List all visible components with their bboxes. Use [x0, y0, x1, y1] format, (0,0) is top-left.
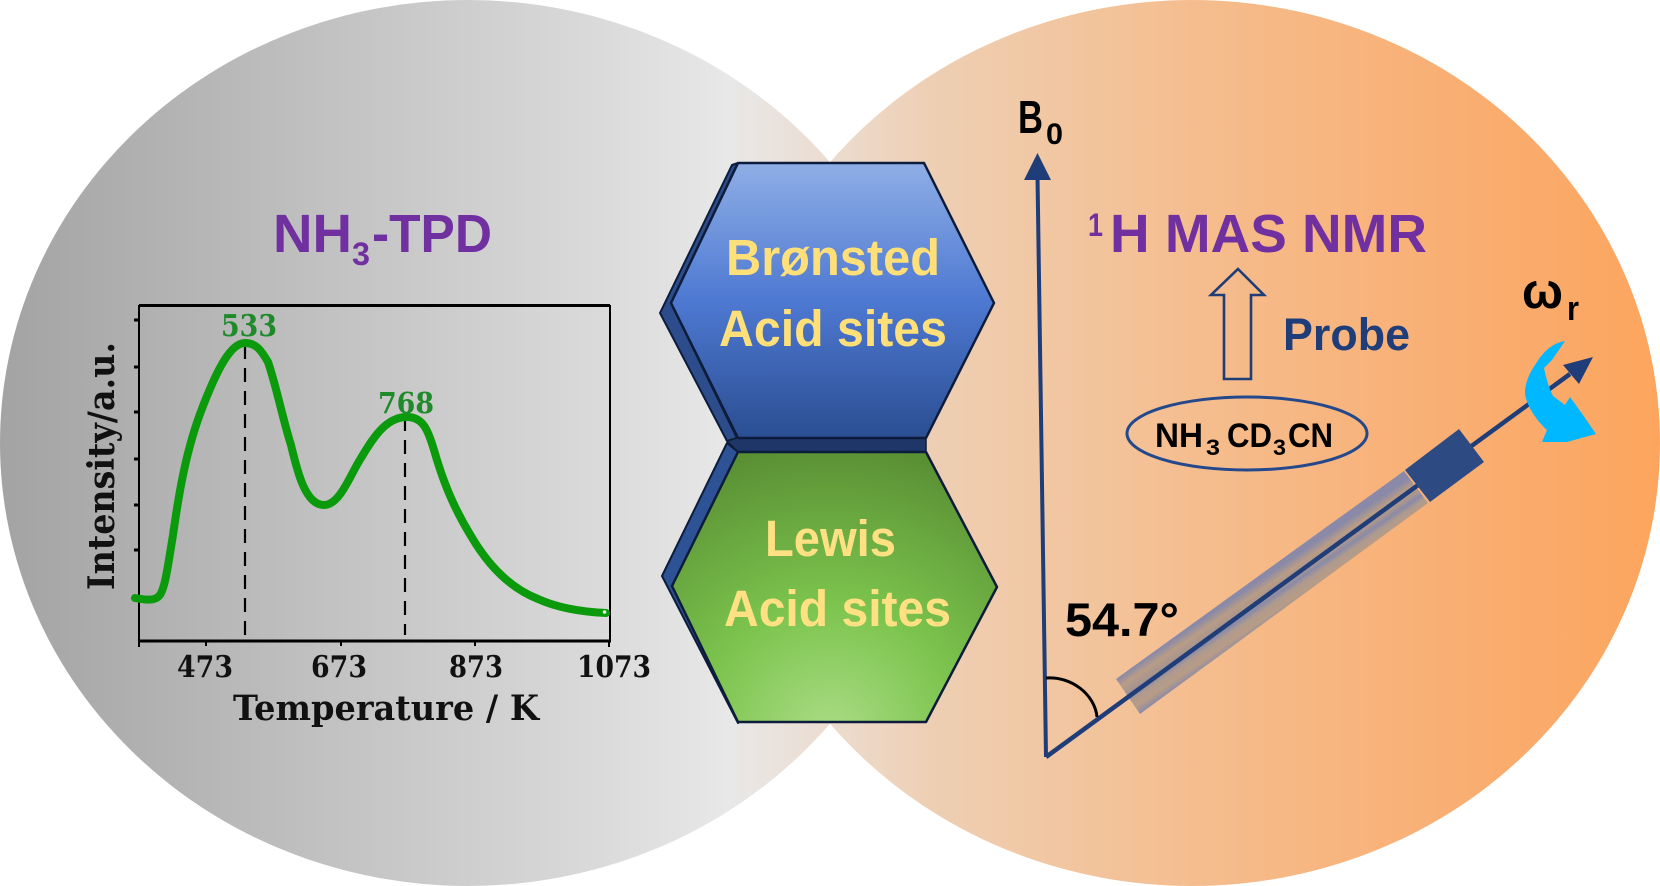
- molecule names: CD: [1227, 417, 1272, 455]
- dashed peak markers: [245, 345, 405, 635]
- hollow arrow: probe direction: [1211, 269, 1264, 379]
- rotor tube: [1116, 471, 1428, 714]
- molecule names: 3: [1206, 435, 1220, 460]
- hexagon lower band: [727, 438, 926, 452]
- molecule names: NH: [1155, 417, 1203, 455]
- heading: NH3-TPD: NH: [273, 204, 352, 264]
- label: Acid sites: [719, 300, 947, 357]
- label: B0: B: [1018, 91, 1043, 143]
- arrow: B0 field axis: [1024, 153, 1051, 757]
- curve end marker: [603, 610, 606, 614]
- x axis tick labels: 673: [311, 650, 367, 685]
- arrow: spinning axis: [1046, 357, 1593, 757]
- ellipse outline: [1127, 397, 1367, 470]
- x axis title: Temperature / K: [233, 688, 541, 729]
- probe molecules: [1127, 397, 1367, 470]
- label: B0: 0: [1046, 118, 1063, 151]
- heading: NH3-TPD: 3: [352, 236, 370, 272]
- label: Probe: Probe: [1283, 309, 1410, 360]
- hexagon: Lewis acid sites: [662, 443, 997, 723]
- label: 54.7 degrees: 54.7°: [1065, 593, 1179, 646]
- hexagon depth strip: [662, 443, 738, 723]
- hexagon: Brønsted acid sites: [660, 163, 994, 452]
- chart: NH3-TPD profile: [81, 305, 651, 729]
- label: Brønsted: [726, 229, 940, 286]
- x axis tick labels: 873: [449, 650, 503, 685]
- label: spinning rate omega r: r: [1567, 290, 1579, 328]
- label: Acid sites: [724, 580, 951, 637]
- molecule names: CN: [1288, 417, 1333, 455]
- label: spinning rate omega r: ω: [1522, 263, 1563, 319]
- heading: NH3-TPD: -TPD: [372, 204, 492, 264]
- molecule names: 3: [1273, 435, 1286, 460]
- hexagon face: [671, 163, 994, 438]
- rotor cap: [1405, 429, 1484, 502]
- chart axes frame: [134, 305, 611, 647]
- x axis tick labels: 1073: [577, 650, 651, 685]
- label: Lewis: [765, 510, 896, 567]
- hexagon depth strip: [660, 163, 738, 441]
- green desorption curve: [135, 343, 606, 613]
- x axis tick labels: 473: [177, 650, 233, 685]
- icon: cyan rotation arrow: [1525, 341, 1596, 442]
- peak label 533: 533: [221, 309, 277, 344]
- peak label 768: 768: [378, 386, 434, 420]
- hexagon face: [672, 452, 997, 722]
- x axis tick labels: [177, 650, 651, 685]
- heading: 1H MAS NMR: 1: [1088, 207, 1103, 243]
- heading: 1H MAS NMR: H MAS NMR: [1110, 204, 1427, 264]
- y axis title: Intensity/a.u.: [81, 342, 123, 590]
- angle arc: [1046, 678, 1097, 717]
